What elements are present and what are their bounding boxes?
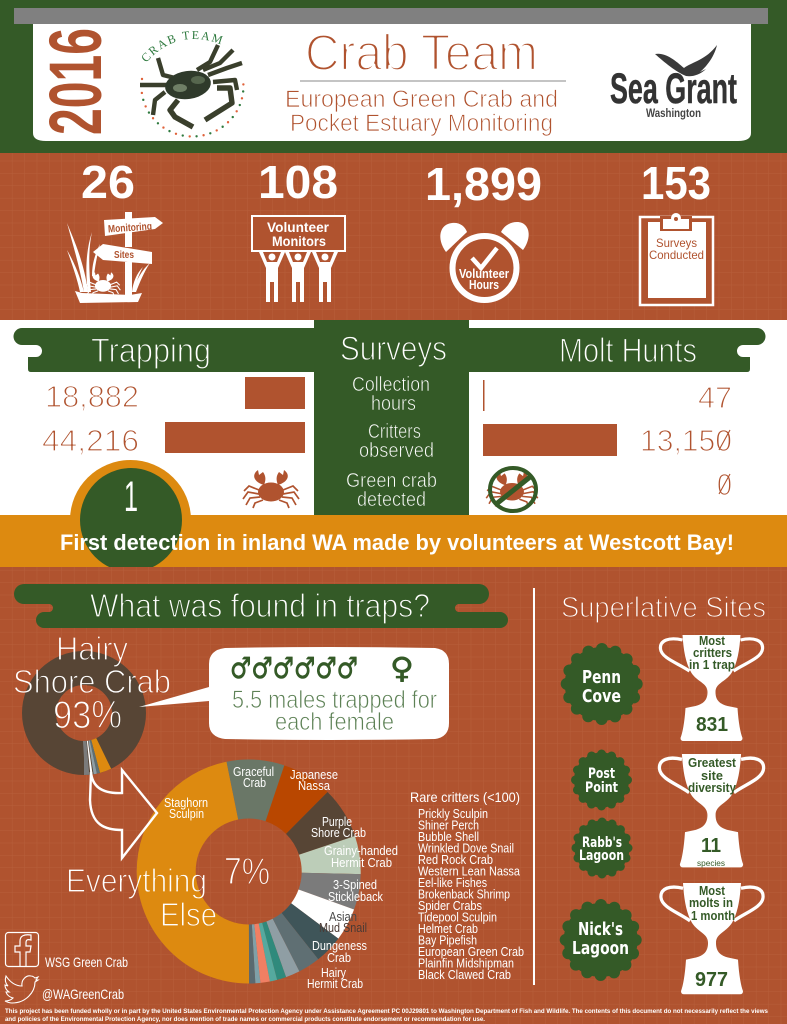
stat: 26 monitoring sites: 26 — [81, 156, 135, 208]
badge: rabbs lagoon — [574, 820, 630, 876]
donut segment labels: Hairy — [321, 966, 347, 980]
heading: molt hunts: Molt Hunts — [559, 332, 697, 370]
icon: twitter — [5, 976, 38, 1003]
list: rare critters: Plainfin Midshipman — [418, 956, 514, 970]
donut segment labels: Stickleback — [328, 890, 384, 904]
list: rare critters — [410, 789, 524, 982]
badge: nicks lagoon: Nick's — [578, 919, 623, 940]
stat: 26 monitoring sites: Monitoring — [108, 220, 152, 236]
donut segment labels: Graceful — [233, 765, 274, 779]
badge: post point: Point — [585, 780, 618, 796]
label: everything else — [66, 862, 217, 933]
subtitle: European Green Crab and — [285, 86, 558, 113]
trophy: greatest site diversity: Greatest — [688, 756, 737, 770]
molt hunts: zero detected: 0 — [717, 467, 732, 502]
title: Crab Team — [305, 24, 538, 81]
donut segment labels: Japanese — [290, 768, 338, 782]
list: rare critters: European Green Crab — [418, 944, 524, 959]
survey row labels — [346, 374, 437, 511]
donut segment labels: Shore Crab — [311, 826, 366, 840]
logo: crab team: CRAB TEAM — [142, 31, 224, 62]
badge: rabbs lagoon: Lagoon — [579, 848, 624, 864]
donut segment labels: Dungeness — [312, 939, 367, 953]
stat: 153 surveys conducted — [640, 157, 713, 305]
donut label: hairy shore crab 93 percent — [13, 630, 171, 737]
survey row labels: Collection — [352, 374, 430, 396]
molt hunts: collection hours: 47 — [698, 380, 732, 415]
orange callout band: 1 — [124, 473, 138, 521]
donut segment labels: Crab — [327, 951, 351, 965]
list: rare critters: Shiner Perch — [418, 818, 479, 832]
donut segment labels: Mud Snail — [319, 921, 367, 935]
list: rare critters: Eel-like Fishes — [418, 875, 487, 890]
trophy: most molts in 1 month: 1 month — [691, 909, 735, 923]
orange callout band: First detection in inland WA made by volunteers at Westcott Bay! — [60, 530, 734, 555]
survey row labels: Green crab — [346, 470, 437, 492]
stat: 108 volunteer monitors: 108 — [258, 156, 338, 208]
heading ribbon: what was found in traps — [14, 584, 508, 628]
label: everything else: Else — [160, 896, 217, 933]
donut segment labels: Nassa — [298, 779, 330, 793]
logo: sea grant: Washington — [646, 108, 701, 120]
donut segment labels: Staghorn — [164, 796, 208, 810]
survey row labels: Critters — [368, 421, 421, 443]
text: twitter handle: @WAGreenCrab — [42, 986, 124, 1002]
donut label: hairy shore crab 93 percent: 93% — [53, 694, 122, 737]
donut segment labels: Sculpin — [169, 807, 204, 821]
text: facebook name: WSG Green Crab — [45, 954, 128, 970]
trophy: most molts in 1 month: Most — [699, 884, 726, 898]
stat: 153 surveys conducted: Surveys — [656, 236, 697, 250]
trophy: greatest site diversity: 11 — [701, 835, 721, 857]
trophy: most molts in 1 month: molts in — [689, 896, 733, 910]
survey row labels: hours — [371, 393, 416, 415]
stat: 108 volunteer monitors — [252, 156, 345, 302]
list: rare critters: Western Lean Nassa — [418, 864, 521, 878]
trophy: greatest site diversity — [659, 754, 764, 868]
trapping: critters observed: 44,216 — [42, 423, 139, 458]
heading: trapping: Trapping — [91, 332, 211, 370]
arrow: from donut to everything else — [90, 770, 157, 858]
stat: 108 volunteer monitors: Volunteer — [267, 220, 330, 235]
stat: 26 monitoring sites — [67, 156, 163, 303]
list: rare critters: Bubble Shell — [418, 829, 479, 844]
heading ribbon: what was found in traps: What was found in traps? — [90, 587, 430, 624]
subtitle: Pocket Estuary Monitoring — [290, 110, 553, 137]
header background — [0, 0, 787, 153]
icon: facebook — [6, 932, 38, 967]
list: rare critters: Prickly Sculpin — [418, 806, 488, 821]
callout: male to female ratio: each female — [275, 708, 394, 736]
badge: post point: Post — [588, 766, 615, 782]
trophy: greatest site diversity: diversity — [688, 781, 736, 795]
donut segment labels: Hermit Crab — [307, 977, 363, 991]
donut label: hairy shore crab 93 percent: Shore Crab — [13, 663, 171, 700]
trophy: most critters in 1 trap: critters — [693, 646, 732, 660]
donut segment labels: Hermit Crab — [331, 856, 392, 870]
trophy: greatest site diversity: site — [701, 769, 723, 783]
trophy: most critters in 1 trap — [660, 634, 763, 741]
icon: no crab — [486, 468, 538, 511]
logo: sea grant — [610, 45, 737, 120]
grey top bar — [14, 8, 768, 24]
callout: male to female ratio: 5.5 males trapped for — [232, 686, 437, 714]
donut segment labels: Crab — [243, 776, 266, 790]
stat: 108 volunteer monitors: Monitors — [272, 234, 326, 249]
trophy: most molts in 1 month: 977 — [695, 969, 728, 991]
list: rare critters: Brokenback Shrimp — [418, 886, 510, 902]
donut segment labels: 3-Spined — [333, 878, 377, 892]
donut chart: hairy shore crab — [39, 668, 129, 758]
trapping: collection hours: 18,882 — [45, 379, 139, 414]
subtitle — [285, 86, 558, 137]
stat: 153 surveys conducted: 153 — [641, 157, 711, 209]
stats panel background — [0, 153, 787, 320]
trophy: most critters in 1 trap: Most — [699, 634, 726, 648]
trophy: most critters in 1 trap: in 1 trap — [689, 658, 735, 672]
stat: 26 monitoring sites: Sites — [114, 249, 134, 261]
trophy: most critters in 1 trap: 831 — [696, 714, 728, 736]
stat: 1,899 volunteer hours: Volunteer — [459, 266, 509, 281]
donut segment labels: Grainy-handed — [324, 844, 398, 858]
logo: crab team — [140, 31, 245, 138]
header panel — [33, 24, 751, 141]
list: rare critters: Black Clawed Crab — [418, 967, 511, 982]
list: rare critters: Helmet Crab — [418, 921, 478, 936]
callout: male to female ratio: ♂♂♂♂♂♂ — [230, 651, 358, 685]
trapping: collection hours — [45, 377, 305, 414]
surveys panel — [0, 320, 787, 515]
heading: surveys: Surveys — [340, 330, 447, 368]
footer disclaimer — [5, 1008, 769, 1023]
list: rare critters: Red Rock Crab — [418, 852, 493, 867]
list: rare critters: Spider Crabs — [418, 898, 482, 913]
lower panel background — [0, 567, 787, 1024]
donut segment labels: Purple — [322, 815, 352, 829]
trophy: most molts in 1 month — [661, 883, 763, 994]
survey row labels: detected — [357, 489, 426, 511]
trapping: critters observed — [42, 422, 305, 458]
molt hunts: critters observed — [483, 423, 732, 458]
badge: rabbs lagoon: Rabb's — [582, 835, 622, 851]
footer disclaimer: This project has been funded wholly or in part by the United States Environmental Protection Agency under Assistance Agreement PC 00J29801 to Washington Department of Fish and Wildlife. The contents of this document do not necessarily reflect the views — [5, 1008, 769, 1015]
banner ribbon — [14, 328, 766, 372]
molt hunts: critters observed: 13,150 — [640, 423, 732, 458]
survey row labels: observed — [359, 440, 434, 462]
badge: nicks lagoon — [564, 903, 638, 977]
list: rare critters: Rare critters (<100) — [410, 789, 520, 805]
badge: nicks lagoon: Lagoon — [572, 938, 629, 959]
orange callout band — [0, 460, 787, 567]
donut segment labels — [164, 765, 398, 991]
stat: 1,899 volunteer hours: 1,899 — [425, 158, 542, 210]
donut label: hairy shore crab 93 percent: Hairy — [56, 630, 128, 667]
badge: penn cove: Cove — [582, 686, 621, 707]
donut chart: everything else — [166, 789, 331, 954]
list: rare critters: Bay Pipefish — [418, 932, 477, 948]
badge: post point — [574, 752, 629, 808]
list: rare critters: Wrinkled Dove Snail — [418, 840, 514, 856]
badge: penn cove — [565, 647, 639, 721]
stat: 1,899 volunteer hours: Hours — [469, 277, 499, 292]
stat: 153 surveys conducted: Conducted — [649, 248, 704, 262]
heading: superlative sites: Superlative Sites — [561, 592, 766, 624]
donut segment labels: Asian — [329, 910, 357, 924]
footer disclaimer: and policies of the Environmental Protection Agency, nor does mention of trade names or commercial products constitute endorsement or recommendation for use. — [5, 1016, 485, 1023]
label: everything else: Everything — [66, 862, 207, 899]
trophy: greatest site diversity: species — [697, 859, 725, 868]
icon: crab — [243, 470, 299, 508]
callout: male to female ratio — [139, 647, 449, 740]
callout: male to female ratio: ♀ — [390, 651, 414, 685]
list: rare critters: Tidepool Sculpin — [418, 910, 497, 924]
badge: penn cove: Penn — [582, 667, 621, 688]
donut center: 7 percent: 7% — [224, 851, 270, 893]
stat: 1,899 volunteer hours — [425, 158, 542, 300]
